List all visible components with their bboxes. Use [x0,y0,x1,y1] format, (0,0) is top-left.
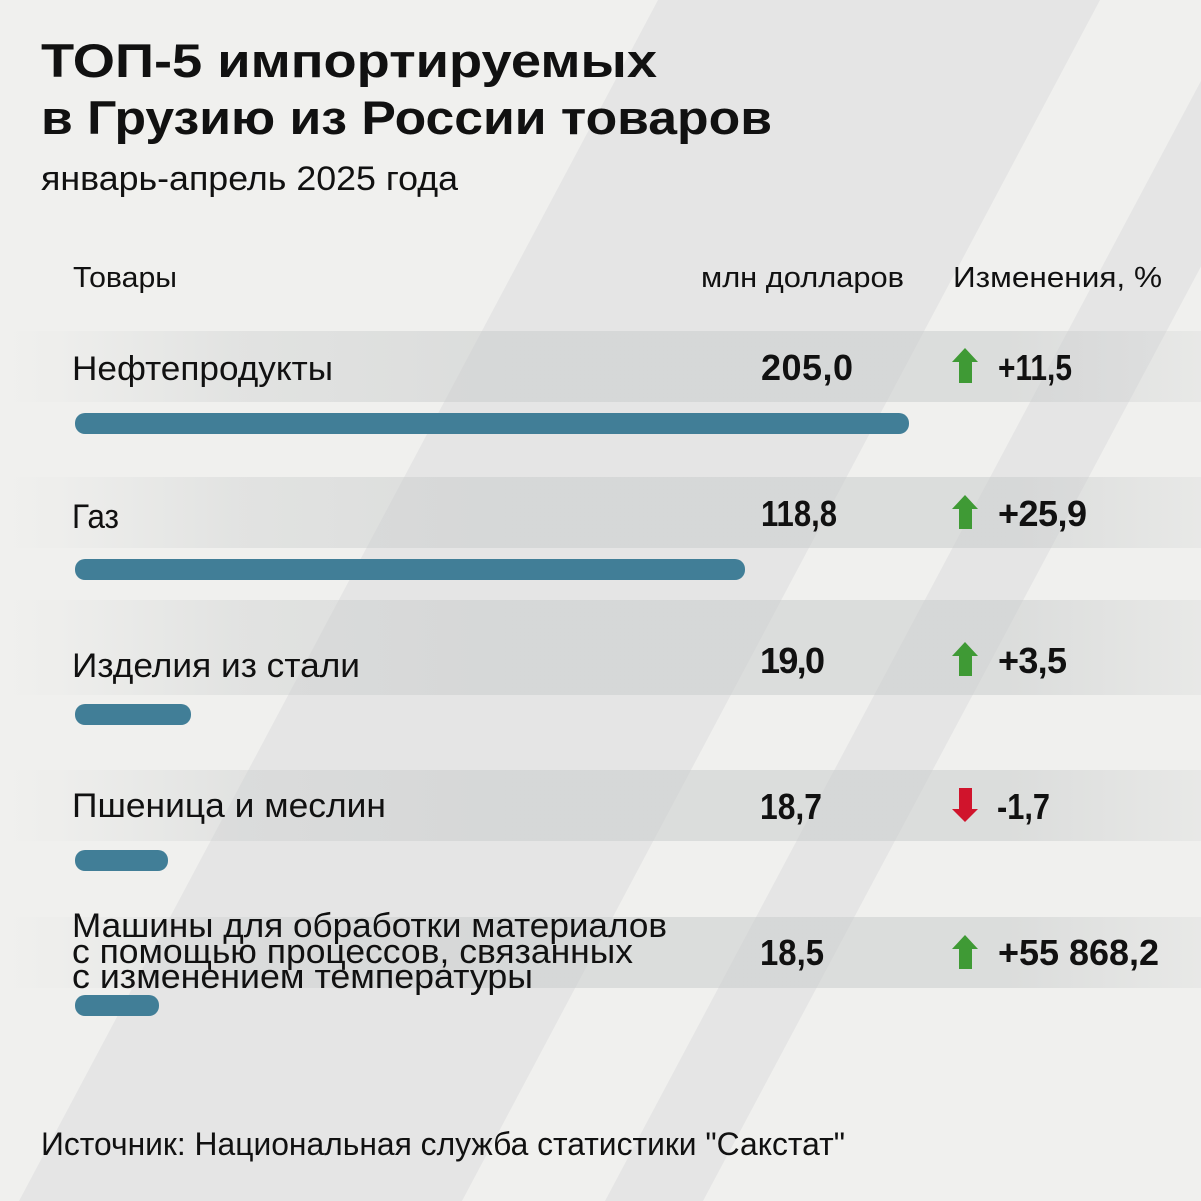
label: Нефтепродукты [72,350,333,388]
label: с изменением температуры [72,958,533,996]
value: 18,5 [760,932,824,973]
row band [0,770,1201,841]
icon: up arrow [952,495,978,529]
title [41,34,772,144]
bar [75,559,745,580]
bar [75,850,168,871]
label: Пшеница и меслин [72,787,386,825]
bar [75,995,159,1016]
row: Нефтепродукты [0,331,1201,434]
row: Изделия из стали [0,600,1201,725]
row band [0,600,1201,695]
table header: Товары [73,262,177,294]
bar [75,704,191,725]
source note: Источник: Национальная служба статистики "Сакстат" [41,1126,845,1162]
change: +25,9 [998,493,1087,534]
row band [0,331,1201,402]
value: 118,8 [761,493,837,534]
value: 19,0 [760,640,825,681]
label: Изделия из стали [72,647,360,685]
row: Пшеница и меслин [0,770,1201,871]
row band [0,477,1201,548]
icon: up arrow [952,642,978,676]
bar [75,413,909,434]
row: Газ [0,477,1201,580]
change: +3,5 [998,640,1067,681]
title: в Грузию из России товаров [41,91,772,144]
row band [0,917,1201,988]
value: 18,7 [760,786,822,827]
icon: up arrow [952,348,978,383]
title: ТОП-5 импортируемых [41,34,657,87]
change: +55 868,2 [998,932,1159,973]
change: -1,7 [997,786,1050,827]
label: Газ [72,498,119,536]
table header: млн долларов [701,262,904,294]
icon: down arrow [952,788,978,822]
label: Машины для обработки материалов [72,907,667,945]
table header: Изменения, % [953,262,1162,294]
subtitle: январь-апрель 2025 года [41,160,458,198]
label [72,907,667,996]
row: Машины для обработки материалов [0,907,1201,1016]
label: с помощью процессов, связанных [72,933,633,971]
value: 205,0 [761,347,853,388]
table header [73,262,1162,294]
change: +11,5 [998,347,1072,388]
icon: up arrow [952,935,978,969]
